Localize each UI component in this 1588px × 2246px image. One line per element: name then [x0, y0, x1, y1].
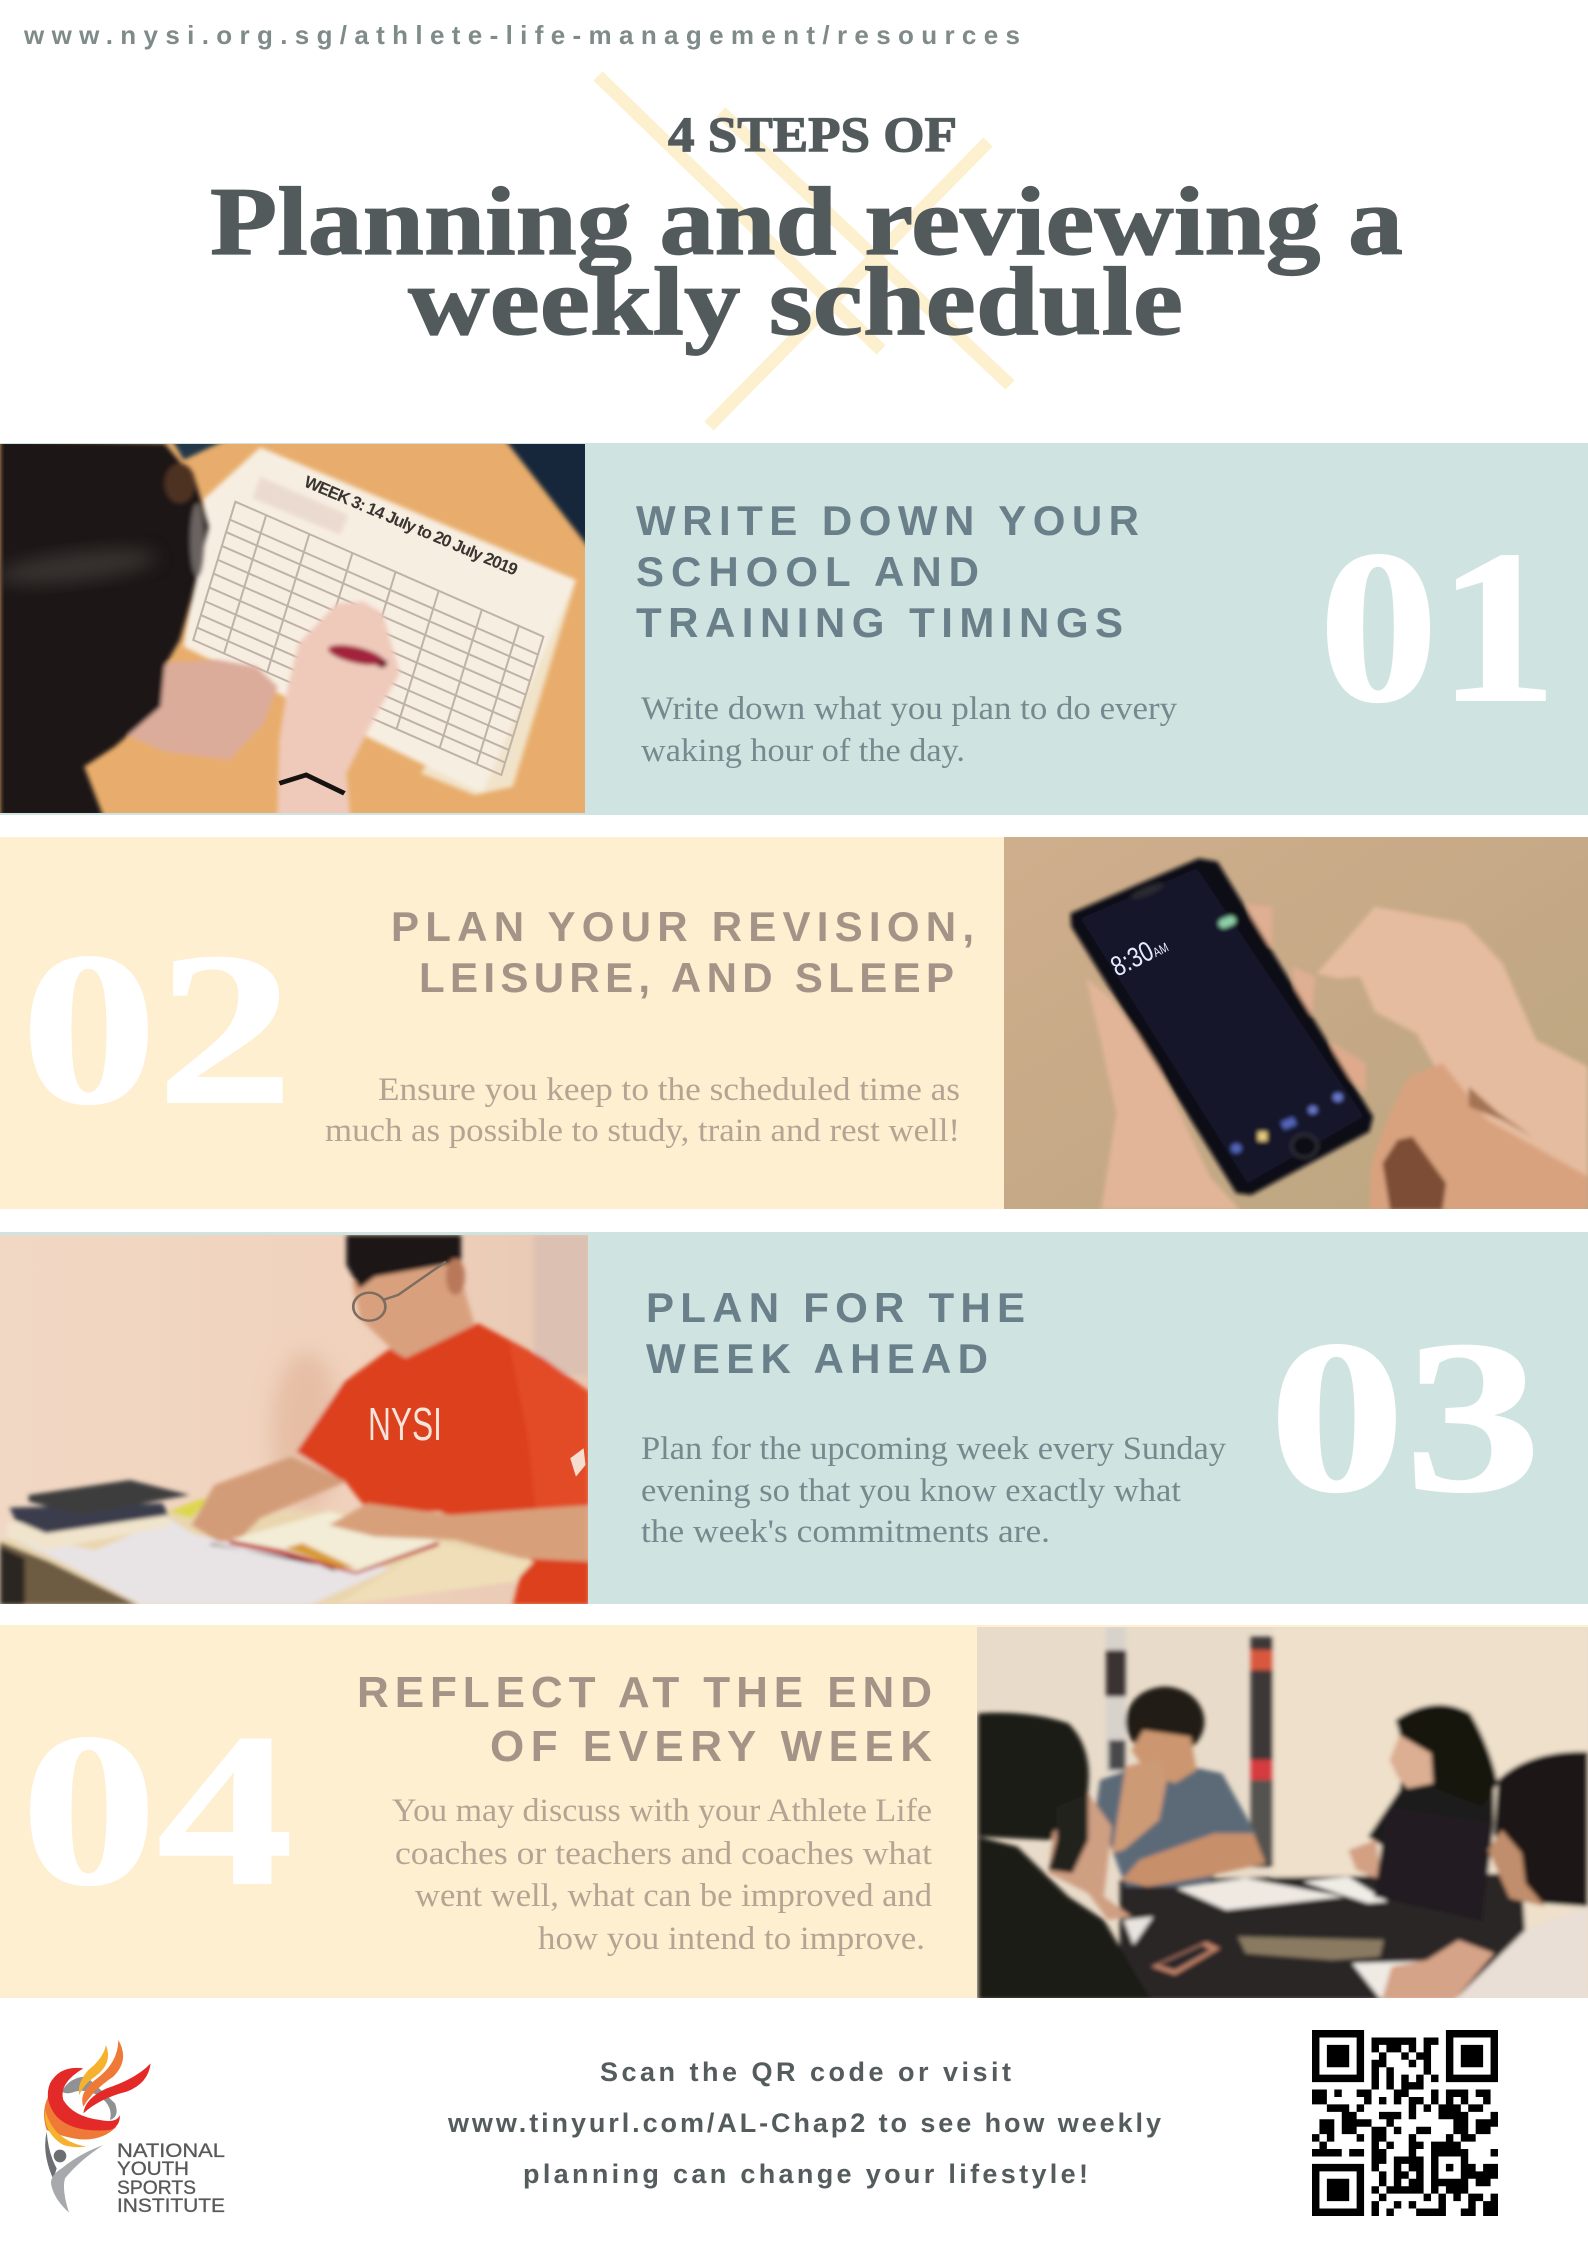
- step number 02: 02: [21, 909, 293, 1150]
- footer call to action: planning can change your lifestyle!: [523, 2159, 1088, 2189]
- logo wordmark: NATIONAL: [117, 2141, 225, 2162]
- step 4 body: coaches or teachers and coaches what: [395, 1836, 932, 1872]
- QR code: [1312, 2030, 1498, 2216]
- photo: athlete studying at desk: [0, 1235, 589, 1605]
- step 3 heading: PLAN FOR THE: [646, 1284, 1025, 1331]
- photo: group discussion: [977, 1627, 1588, 2000]
- step 4 body: went well, what can be improved and: [415, 1878, 933, 1914]
- step 1 body: [641, 691, 1178, 769]
- step 2 heading: [391, 903, 974, 1001]
- title line 1: Planning and reviewing a: [210, 168, 1403, 276]
- step 2 heading: PLAN YOUR REVISION,: [391, 903, 974, 950]
- step 1 heading: [636, 497, 1139, 646]
- kicker: 4 steps of: 4 STEPS OF: [668, 106, 957, 162]
- step 2 body: much as possible to study, train and rest well!: [325, 1113, 960, 1149]
- step 4 heading: OF EVERY WEEK: [490, 1722, 932, 1771]
- title block: [210, 106, 1403, 356]
- website url: www.nysi.org.sg/athlete-life-management/resources: [23, 20, 1020, 50]
- logo wordmark: YOUTH: [117, 2159, 189, 2180]
- step 2 body: [325, 1072, 960, 1149]
- step 4 body: You may discuss with your Athlete Life: [392, 1793, 932, 1829]
- logo: National Youth Sports Institute: [44, 2040, 225, 2217]
- shirt logo: NYSI: [368, 1398, 442, 1450]
- step 3 heading: WEEK AHEAD: [646, 1335, 988, 1382]
- step 4 body: [392, 1793, 933, 1957]
- label on timetable: WEEK 3: 14 July to 20 July 2019: [301, 472, 521, 580]
- step 1 heading: TRAINING TIMINGS: [636, 599, 1123, 646]
- title line 2: weekly schedule: [408, 248, 1183, 356]
- alarm time on phone: 8:30AM: [1106, 928, 1172, 982]
- panel: step 2: [0, 837, 1588, 1210]
- panel: step 3: [0, 1232, 1588, 1605]
- step 3 body: Plan for the upcoming week every Sunday: [641, 1431, 1227, 1467]
- panel: step 4: [0, 1625, 1588, 2000]
- decorative cross behind title: [598, 76, 1010, 426]
- step 4 body: how you intend to improve.: [538, 1921, 925, 1957]
- footer call to action: www.tinyurl.com/AL-Chap2 to see how weekly: [447, 2108, 1161, 2138]
- step 1 body: Write down what you plan to do every: [641, 691, 1178, 727]
- step 1 heading: WRITE DOWN YOUR: [636, 497, 1139, 544]
- step 2 heading: LEISURE, AND SLEEP: [419, 954, 954, 1001]
- step 1 body: waking hour of the day.: [641, 733, 965, 769]
- step 3 body: [641, 1431, 1227, 1550]
- panel: step 1: [0, 440, 1588, 817]
- step number 03: 03: [1269, 1297, 1541, 1538]
- step 1 heading: SCHOOL AND: [636, 548, 979, 595]
- step 4 heading: [357, 1668, 932, 1771]
- step number 01: 01: [1319, 507, 1557, 748]
- step 3 body: the week's commitments are.: [641, 1514, 1050, 1550]
- step number 04: 04: [21, 1690, 293, 1931]
- photo: writing on a weekly timetable: [0, 440, 589, 817]
- step 4 heading: REFLECT AT THE END: [357, 1668, 932, 1717]
- step 2 body: Ensure you keep to the scheduled time as: [378, 1072, 960, 1108]
- photo: phone alarm: [1004, 837, 1588, 1210]
- logo wordmark: INSTITUTE: [117, 2196, 225, 2217]
- footer call to action: Scan the QR code or visit: [600, 2057, 1011, 2087]
- logo wordmark: SPORTS: [117, 2178, 196, 2199]
- timetable grid: [193, 502, 543, 775]
- step 3 heading: [646, 1284, 1025, 1382]
- step 3 body: evening so that you know exactly what: [641, 1473, 1181, 1509]
- logo wordmark: [117, 2141, 225, 2217]
- footer call to action: [447, 2057, 1161, 2189]
